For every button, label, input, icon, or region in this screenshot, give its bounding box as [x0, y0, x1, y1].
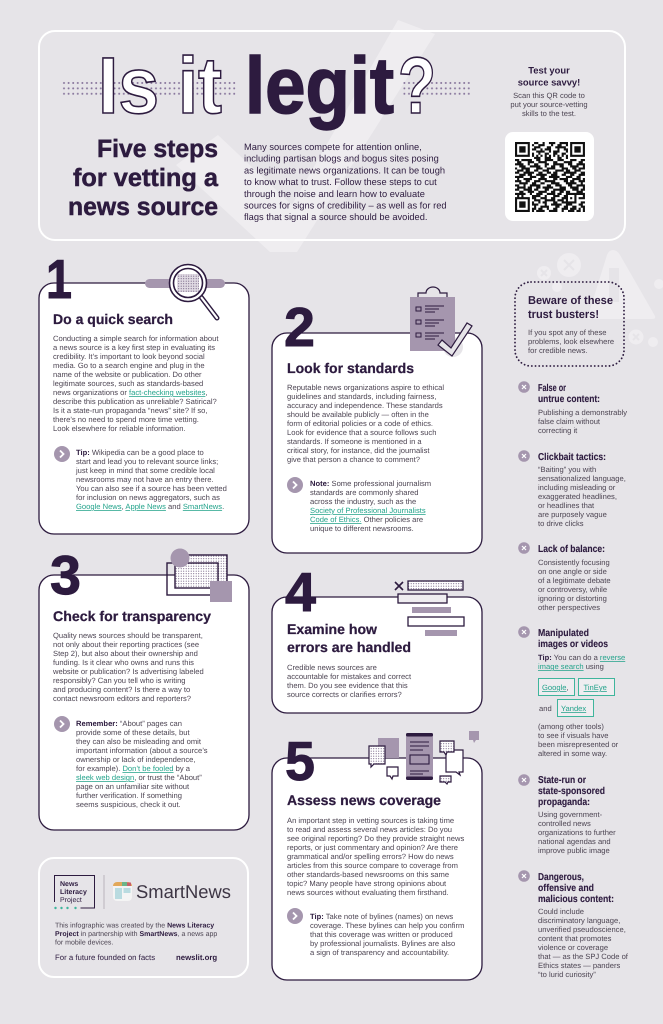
note text: Code of Ethics. Other policies are — [310, 515, 423, 524]
body text: should be available publicly — often in the — [287, 410, 429, 419]
icon: note arrow — [287, 477, 303, 493]
logo: News Literacy Project: News — [60, 881, 78, 888]
description: exaggerated headlines, — [538, 492, 617, 501]
body text: give that person a chance to comment? — [287, 455, 420, 464]
icon: overlapping frames — [167, 548, 232, 602]
callout heading: trust busters! — [528, 309, 599, 321]
trust buster: clickbait — [518, 450, 626, 528]
body text: Quality news sources should be transparent, — [53, 631, 203, 640]
tagline and URL: newslit.org — [176, 953, 217, 962]
subtitle: news source — [68, 193, 218, 221]
title: Is it legit?: it — [178, 41, 222, 130]
note text: unique to different newsrooms. — [310, 524, 414, 533]
remember text: important information (about a source’s — [76, 746, 208, 755]
description: discriminatory language, — [538, 916, 620, 925]
description: other perspectives — [538, 603, 600, 612]
note text: Note: Some professional journalism — [310, 479, 431, 488]
body text: reports, or just commentary and opinion? Are there — [287, 843, 458, 852]
body text: standards. If someone is mentioned in a — [287, 437, 422, 446]
trust buster: dangerous content — [518, 870, 629, 979]
description: or headlines that — [538, 501, 595, 510]
description: “to lurid curiosity” — [538, 970, 596, 979]
remember text: seems suspicious, check it out. — [76, 800, 181, 809]
heading: propaganda: — [538, 797, 590, 808]
note text: across the industry, such as the — [310, 497, 416, 506]
icon: x — [518, 450, 530, 462]
body text: name of the website or publication. Do other — [53, 370, 202, 379]
trust buster: propaganda — [518, 774, 616, 855]
subtitle — [68, 135, 219, 221]
dotted band behind title — [62, 81, 471, 98]
heading: Manipulated — [538, 628, 589, 639]
heading: errors are handled — [287, 639, 411, 655]
description: improve public image — [538, 846, 610, 855]
icon: x — [518, 626, 530, 638]
credit text: for mobile devices. — [55, 938, 113, 946]
link boxes: and — [539, 704, 552, 713]
body text: media. Go to a search engine and plug in the — [53, 361, 205, 370]
heading: Assess news coverage — [287, 792, 441, 808]
body text: website or publication? Is advertising labeled — [52, 667, 204, 676]
note text: standards are commonly shared — [310, 488, 418, 497]
heading: Check for transparency — [53, 608, 211, 624]
heading: Examine how — [287, 621, 377, 637]
icon: x — [518, 542, 530, 554]
QR call to action: put your source-vetting — [510, 100, 588, 109]
description: “Baiting” you with — [538, 465, 596, 474]
subtitle: Five steps — [97, 135, 218, 163]
heading: Look for standards — [287, 360, 414, 376]
QR call to action: Test your — [528, 64, 570, 76]
callout: trust busters — [515, 282, 624, 366]
body text: responsibly? Can you tell who is writing — [53, 676, 186, 685]
body text: and producing content? Is there a way to — [53, 685, 190, 694]
step 3 panel — [39, 544, 249, 830]
step 5 panel — [272, 730, 482, 980]
description: altered in some way. — [538, 749, 607, 758]
tip text: a sign of transparency and accountability. — [310, 948, 449, 957]
callout heading — [528, 295, 613, 321]
icon: magnifying glass — [145, 264, 225, 318]
description: to drive clicks — [538, 519, 584, 528]
link boxes: TinEye — [584, 683, 607, 692]
body text: guidelines and standards, including fairness, — [287, 392, 436, 401]
description: are purposely vague — [538, 510, 607, 519]
QR call to action — [510, 64, 588, 118]
description: national agendas and — [538, 837, 611, 846]
icon: clipboard with check — [410, 287, 472, 357]
callout text: If you spot any of these — [528, 328, 607, 337]
description: Ethics states — panders — [538, 961, 621, 970]
body text: funding. Is it clear who owns and runs this — [53, 658, 194, 667]
description: organizations to further — [538, 828, 616, 837]
remember text: sleek web design, or trust the “About” — [76, 773, 202, 782]
body text: news sources without evaluating them firsthand. — [287, 888, 449, 897]
tip text: that this coverage was written or produced — [310, 930, 453, 939]
description: sensationalized language, — [538, 474, 626, 483]
remember text: for example). Don’t be fooled by a — [76, 764, 190, 773]
title: Is it legit?: ? — [398, 41, 436, 130]
callout heading: Beware of these — [528, 295, 613, 307]
description: that — as the SPJ Code of — [538, 952, 629, 961]
body text: other standards-based newsrooms on this same — [287, 870, 449, 879]
title: Is it legit?: Is — [98, 41, 159, 130]
body text: not only about their reporting practices (see — [53, 640, 199, 649]
body text: form of editorial policies or a code of ethics. — [287, 419, 433, 428]
background: large faint check mark — [176, 20, 435, 252]
step 4 panel — [272, 561, 482, 713]
remember text: further verification. If something — [76, 791, 182, 800]
title: Is it legit? — [98, 41, 436, 130]
icon: x — [518, 774, 530, 786]
heading: untrue content: — [538, 394, 600, 405]
heading — [538, 775, 605, 808]
intro text: to know what to trust. Follow these steps to cut — [244, 177, 437, 187]
body text: Step 2), but also about their ownership and — [53, 649, 198, 658]
logo: SmartNews — [104, 875, 231, 909]
QR code — [505, 132, 594, 221]
step 1 panel — [39, 248, 249, 534]
number 1: 1 — [46, 248, 72, 310]
credit text: This infographic was created by the News Literacy — [55, 922, 214, 930]
body text: critical story, for instance, did the journalist — [287, 446, 430, 455]
description: been misrepresented or — [538, 740, 619, 749]
body text: Look elsewhere for reliable information. — [53, 424, 186, 433]
icon: tip arrow — [54, 446, 70, 462]
body text: legitimate sources, such as standards-based — [53, 379, 203, 388]
link boxes — [538, 678, 614, 716]
heading: Dangerous, — [538, 872, 584, 883]
body text: them. Do you see evidence that this — [287, 681, 408, 690]
body text: describe this publication as unreliable? Satirical? — [53, 397, 217, 406]
tip text: Google News, Apple News and SmartNews. — [76, 502, 224, 511]
icon: tip arrow — [287, 908, 303, 924]
body text: a news source is a key first step in evaluating its — [53, 343, 215, 352]
tip text: coverage. These bylines can help you confirm — [310, 921, 464, 930]
title: Is it legit?: legit — [245, 41, 394, 130]
number 2: 2 — [284, 296, 315, 358]
body text: accuracy and independence. These standards — [287, 401, 443, 410]
description: violence or coverage — [538, 943, 608, 952]
tagline and URL: For a future founded on facts — [55, 953, 155, 962]
credits panel — [39, 858, 248, 977]
description: or controversy, while — [538, 585, 607, 594]
heading: False or — [538, 383, 566, 394]
heading: images or videos — [538, 639, 608, 650]
tip text: by professional journalists. Bylines are also — [310, 939, 455, 948]
tip text: Tip: Wikipedia can be a good place to — [76, 448, 204, 457]
logo: News Literacy Project: Literacy — [60, 888, 87, 896]
link boxes: Google, — [542, 683, 569, 692]
logo: SmartNews: SmartNews — [136, 881, 231, 902]
description: including misleading or — [538, 483, 616, 492]
tip: image search using — [538, 662, 604, 671]
body text: to read and assess several news articles: Do you — [287, 825, 452, 834]
heading — [287, 621, 411, 655]
icon: x — [518, 870, 530, 882]
callout text: for credible news. — [528, 346, 588, 355]
icon: phone and chat bubbles — [369, 731, 479, 784]
note text: Society of Professional Journalists — [310, 506, 426, 515]
background: warning triangle and X circles — [537, 250, 663, 347]
heading: malicious content: — [538, 894, 614, 905]
body text: Credible news sources are — [287, 663, 377, 672]
trust buster: lack of balance — [518, 542, 611, 612]
icon: x — [518, 381, 530, 393]
intro text: Many sources compete for attention online, — [244, 142, 422, 152]
description: ignoring or distorting — [538, 594, 607, 603]
description: controlled news — [538, 819, 591, 828]
remember text: Remember: “About” pages can — [76, 719, 182, 728]
body text: Look for evidence that a source follows such — [287, 428, 436, 437]
callout text: problems, look elsewhere — [528, 337, 614, 346]
header panel — [39, 31, 625, 240]
description: to see if visuals have — [538, 731, 608, 740]
heading: Clickbait tactics: — [538, 452, 606, 463]
body text: see original reporting? Do they provide straight news — [287, 834, 464, 843]
intro text: flags that signal a source should be avoided. — [244, 212, 427, 222]
description: unverified pseudoscience, — [538, 925, 626, 934]
description: of a legitimate debate — [538, 576, 611, 585]
description: on one angle or side — [538, 567, 607, 576]
body text: An important step in vetting sources is taking time — [287, 816, 454, 825]
heading: state-sponsored — [538, 786, 605, 797]
remember text: they can also be misleading and omit — [76, 737, 202, 746]
body text: articles from this source compare to coverage from — [287, 861, 458, 870]
subtitle: for vetting a — [73, 164, 219, 192]
heading: State-run or — [538, 775, 586, 786]
body text: source corrects or clarifies errors? — [287, 690, 402, 699]
body text: topic? Many people have strong opinions about — [287, 879, 447, 888]
body text: accountable for mistakes and correct — [287, 672, 412, 681]
QR call to action: Scan this QR code to — [513, 91, 585, 100]
body text: news organizations or fact-checking websites, — [53, 388, 208, 397]
tagline and URL — [55, 953, 217, 962]
tip text: You can also see if a source has been vetted — [76, 484, 227, 493]
tip: Tip: You can do a reverse — [538, 653, 625, 662]
number 3: 3 — [50, 544, 81, 606]
heading — [538, 628, 608, 650]
step 2 panel — [272, 287, 482, 553]
tip text: newsrooms may not have an entry there. — [76, 475, 214, 484]
heading — [538, 872, 614, 905]
icon: correction bars — [395, 581, 464, 636]
body text: there’s no need to spend more time vetting. — [53, 415, 199, 424]
description: Publishing a demonstrably — [538, 408, 627, 417]
intro text: as legitimate news organizations. It can be tough — [244, 165, 445, 175]
intro text: including partisan blogs and bogus sites posing — [244, 154, 439, 164]
body text: grammatical and/or spelling errors? How do news — [287, 852, 454, 861]
link boxes: Yandex — [561, 704, 586, 713]
description: false claim without — [538, 417, 601, 426]
icon: remember arrow — [54, 716, 70, 732]
body text: Conducting a simple search for information about — [53, 334, 219, 343]
intro text: sources for signs of credibility – as well as for red — [244, 200, 447, 210]
tip text: start and lead you to relevant source links; — [76, 457, 218, 466]
description: correcting it — [538, 426, 578, 435]
description: Using government- — [538, 810, 603, 819]
credit text: Project in partnership with SmartNews, a news app — [55, 931, 217, 938]
remember text: page on an unfamiliar site without — [76, 782, 190, 791]
remember text: ownership or lack of independence, — [76, 755, 195, 764]
remember text: provide some of these details, but — [76, 728, 190, 737]
number 4: 4 — [285, 561, 316, 623]
trust buster: manipulated images — [518, 626, 625, 758]
logo: News Literacy Project: Project — [60, 896, 82, 904]
trust buster: false content — [518, 381, 627, 435]
heading: Lack of balance: — [538, 544, 605, 555]
number 5: 5 — [285, 730, 315, 792]
body text: credibility. It’s important to look beyond social — [53, 352, 205, 361]
description: (among other tools) — [538, 722, 604, 731]
QR call to action: source savvy! — [518, 76, 580, 88]
intro text: through the noise and learn how to evaluate — [244, 189, 425, 199]
tip text: for inclusion on news aggregators, such as — [76, 493, 220, 502]
logo: News Literacy Project — [54, 876, 94, 909]
description: content that promotes — [538, 934, 612, 943]
body text: Reputable news organizations aspire to ethical — [287, 383, 444, 392]
QR call to action: skills to the test. — [522, 109, 576, 118]
tip text: Tip: Take note of bylines (names) on news — [310, 912, 453, 921]
body text: contact newsroom editors and reporters? — [53, 694, 191, 703]
tip text: just keep in mind that some credible local — [75, 466, 215, 475]
heading — [538, 383, 600, 405]
heading: offensive and — [538, 883, 594, 894]
description: Consistently focusing — [538, 558, 610, 567]
description: Could include — [538, 907, 584, 916]
body text: Is it a state-run propaganda “news” site? If so, — [53, 406, 208, 415]
heading: Do a quick search — [53, 311, 173, 327]
